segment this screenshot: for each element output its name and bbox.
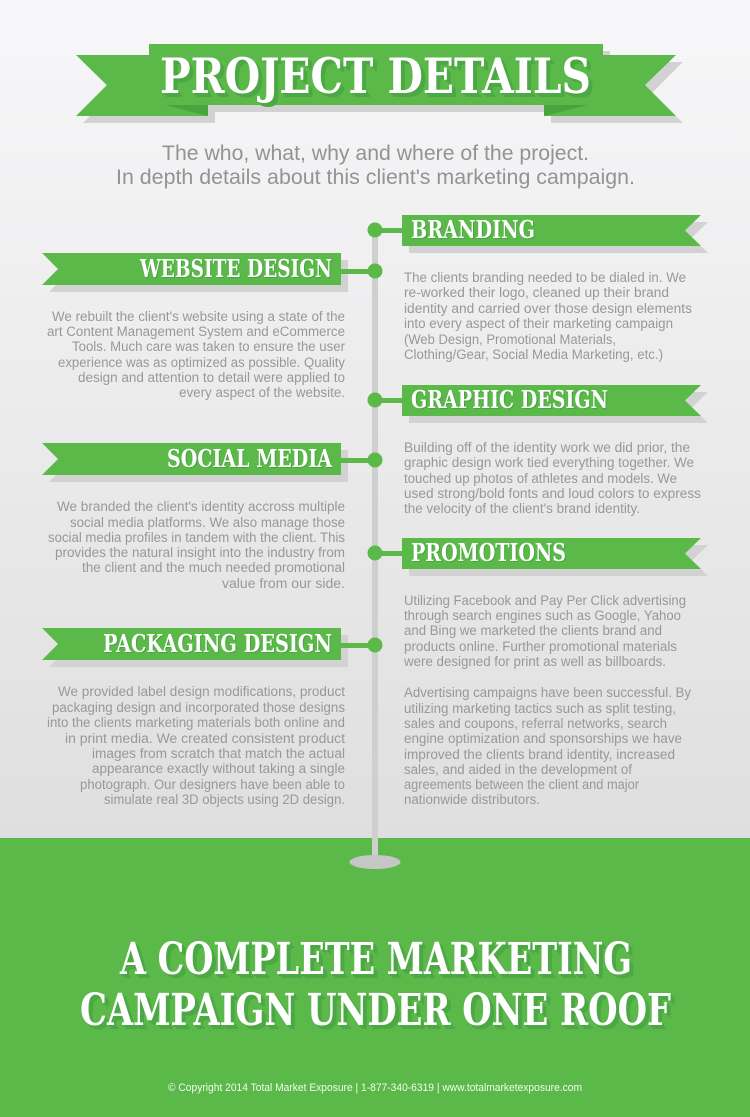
text block: Tools. Much care was taken to ensure the user [72,339,345,354]
text block: We rebuilt the client's website using a state of the [52,309,345,324]
footer band [0,838,750,1117]
subtitle: In depth details about this client's marketing campaign. [116,166,635,189]
text block: We branded the client's identity accross multiple [57,499,345,514]
title banner [76,44,683,123]
text block: provides the natural insight into the industry from [55,545,345,560]
text block: value from our side. [222,576,345,591]
panel: packaging design [42,628,382,807]
heading: PACKAGING DESIGN [103,629,332,658]
text block: re-worked their logo, cleaned up their brand [404,285,669,300]
text block: We provided label design modifications, product [58,684,345,699]
text block: into the clients marketing materials both online and [47,715,345,730]
text block: improved the clients brand identity, increased [404,747,675,762]
text block: Clothing/Gear, Social Media Marketing, etc.) [404,347,663,362]
text block: every aspect of the website. [179,385,345,400]
heading: GRAPHIC DESIGN [411,385,608,414]
text block: identity and carried over those design elements [404,301,692,316]
panel: promotions [368,538,708,807]
text block: art Content Management System and eCommerce [47,324,345,339]
text block [47,309,345,400]
text block: (Web Design, Promotional Materials, [404,332,616,347]
text block: sales, and aided in the development of [404,762,632,777]
text block: images from scratch that match the actual [92,746,345,761]
text block: simulate real 3D objects using 2D design. [104,792,345,807]
text block: utilizing marketing tactics such as split testing, [404,701,676,716]
text block: used strong/bold fonts and loud colors to express [404,486,701,501]
text block: appearance exactly without taking a single [92,761,345,776]
heading: SOCIAL MEDIA [167,444,332,473]
text block: through search engines such as Google, Yahoo [404,608,681,623]
text block: The clients branding needed to be dialed in. We [404,270,686,285]
closing headline [80,934,671,1036]
timeline pole [350,230,400,869]
text block: social media platforms. We also manage those [70,515,345,530]
copyright line: © Copyright 2014 Total Market Exposure | 1-877-340-6319 | www.totalmarketexposure.com [168,1082,582,1094]
heading: PROMOTIONS [411,538,566,567]
panel: social media [42,443,382,591]
text block: experience was as optimized as possible. Quality [58,355,345,370]
text block [403,593,691,807]
text block [404,440,701,516]
panel: website design [42,253,382,400]
text block: social media profiles in tandem with the client. This [48,530,345,545]
text block: photograph. Our designers have been able to [80,777,345,792]
text block: Utilizing Facebook and Pay Per Click advertising [404,593,686,608]
heading: BRANDING [411,215,535,244]
text block: packaging design and incorporated those designs [52,700,345,715]
title: PROJECT DETAILS [160,47,591,105]
panel: graphic design [368,385,708,516]
heading: WEBSITE DESIGN [139,254,332,283]
text block: products online. Further promotional materials [404,639,677,654]
text block: Building off of the identity work we did prior, the [404,440,690,455]
text block: into every aspect of their marketing campaign [404,316,673,331]
text block: the velocity of the client's brand identity. [404,501,640,516]
panel: branding [368,215,708,362]
text block: touched up photos of athletes and models. We [404,471,677,486]
subtitle [116,142,635,189]
text block: graphic design work tied everything together. We [404,455,694,470]
text block: were designed for print as well as billboards. [403,654,666,669]
text block: and Bing we marketed the clients brand and [404,623,662,638]
text block [47,684,345,807]
text block: in print media. We created consistent product [65,731,345,746]
text block: agreements between the client and major [404,777,639,792]
text block [404,270,692,362]
text block: the client and the much needed promotional [82,560,345,575]
text block: Advertising campaigns have been successful. By [404,685,691,700]
text block [48,499,345,591]
text block: nationwide distributors. [404,792,540,807]
text block: sales and coupons, referral networks, search [404,716,667,731]
text block: engine optimization and sponsorships we have [404,731,682,746]
text block: design and attention to detail were applied to [78,370,345,385]
subtitle: The who, what, why and where of the project. [162,142,589,165]
